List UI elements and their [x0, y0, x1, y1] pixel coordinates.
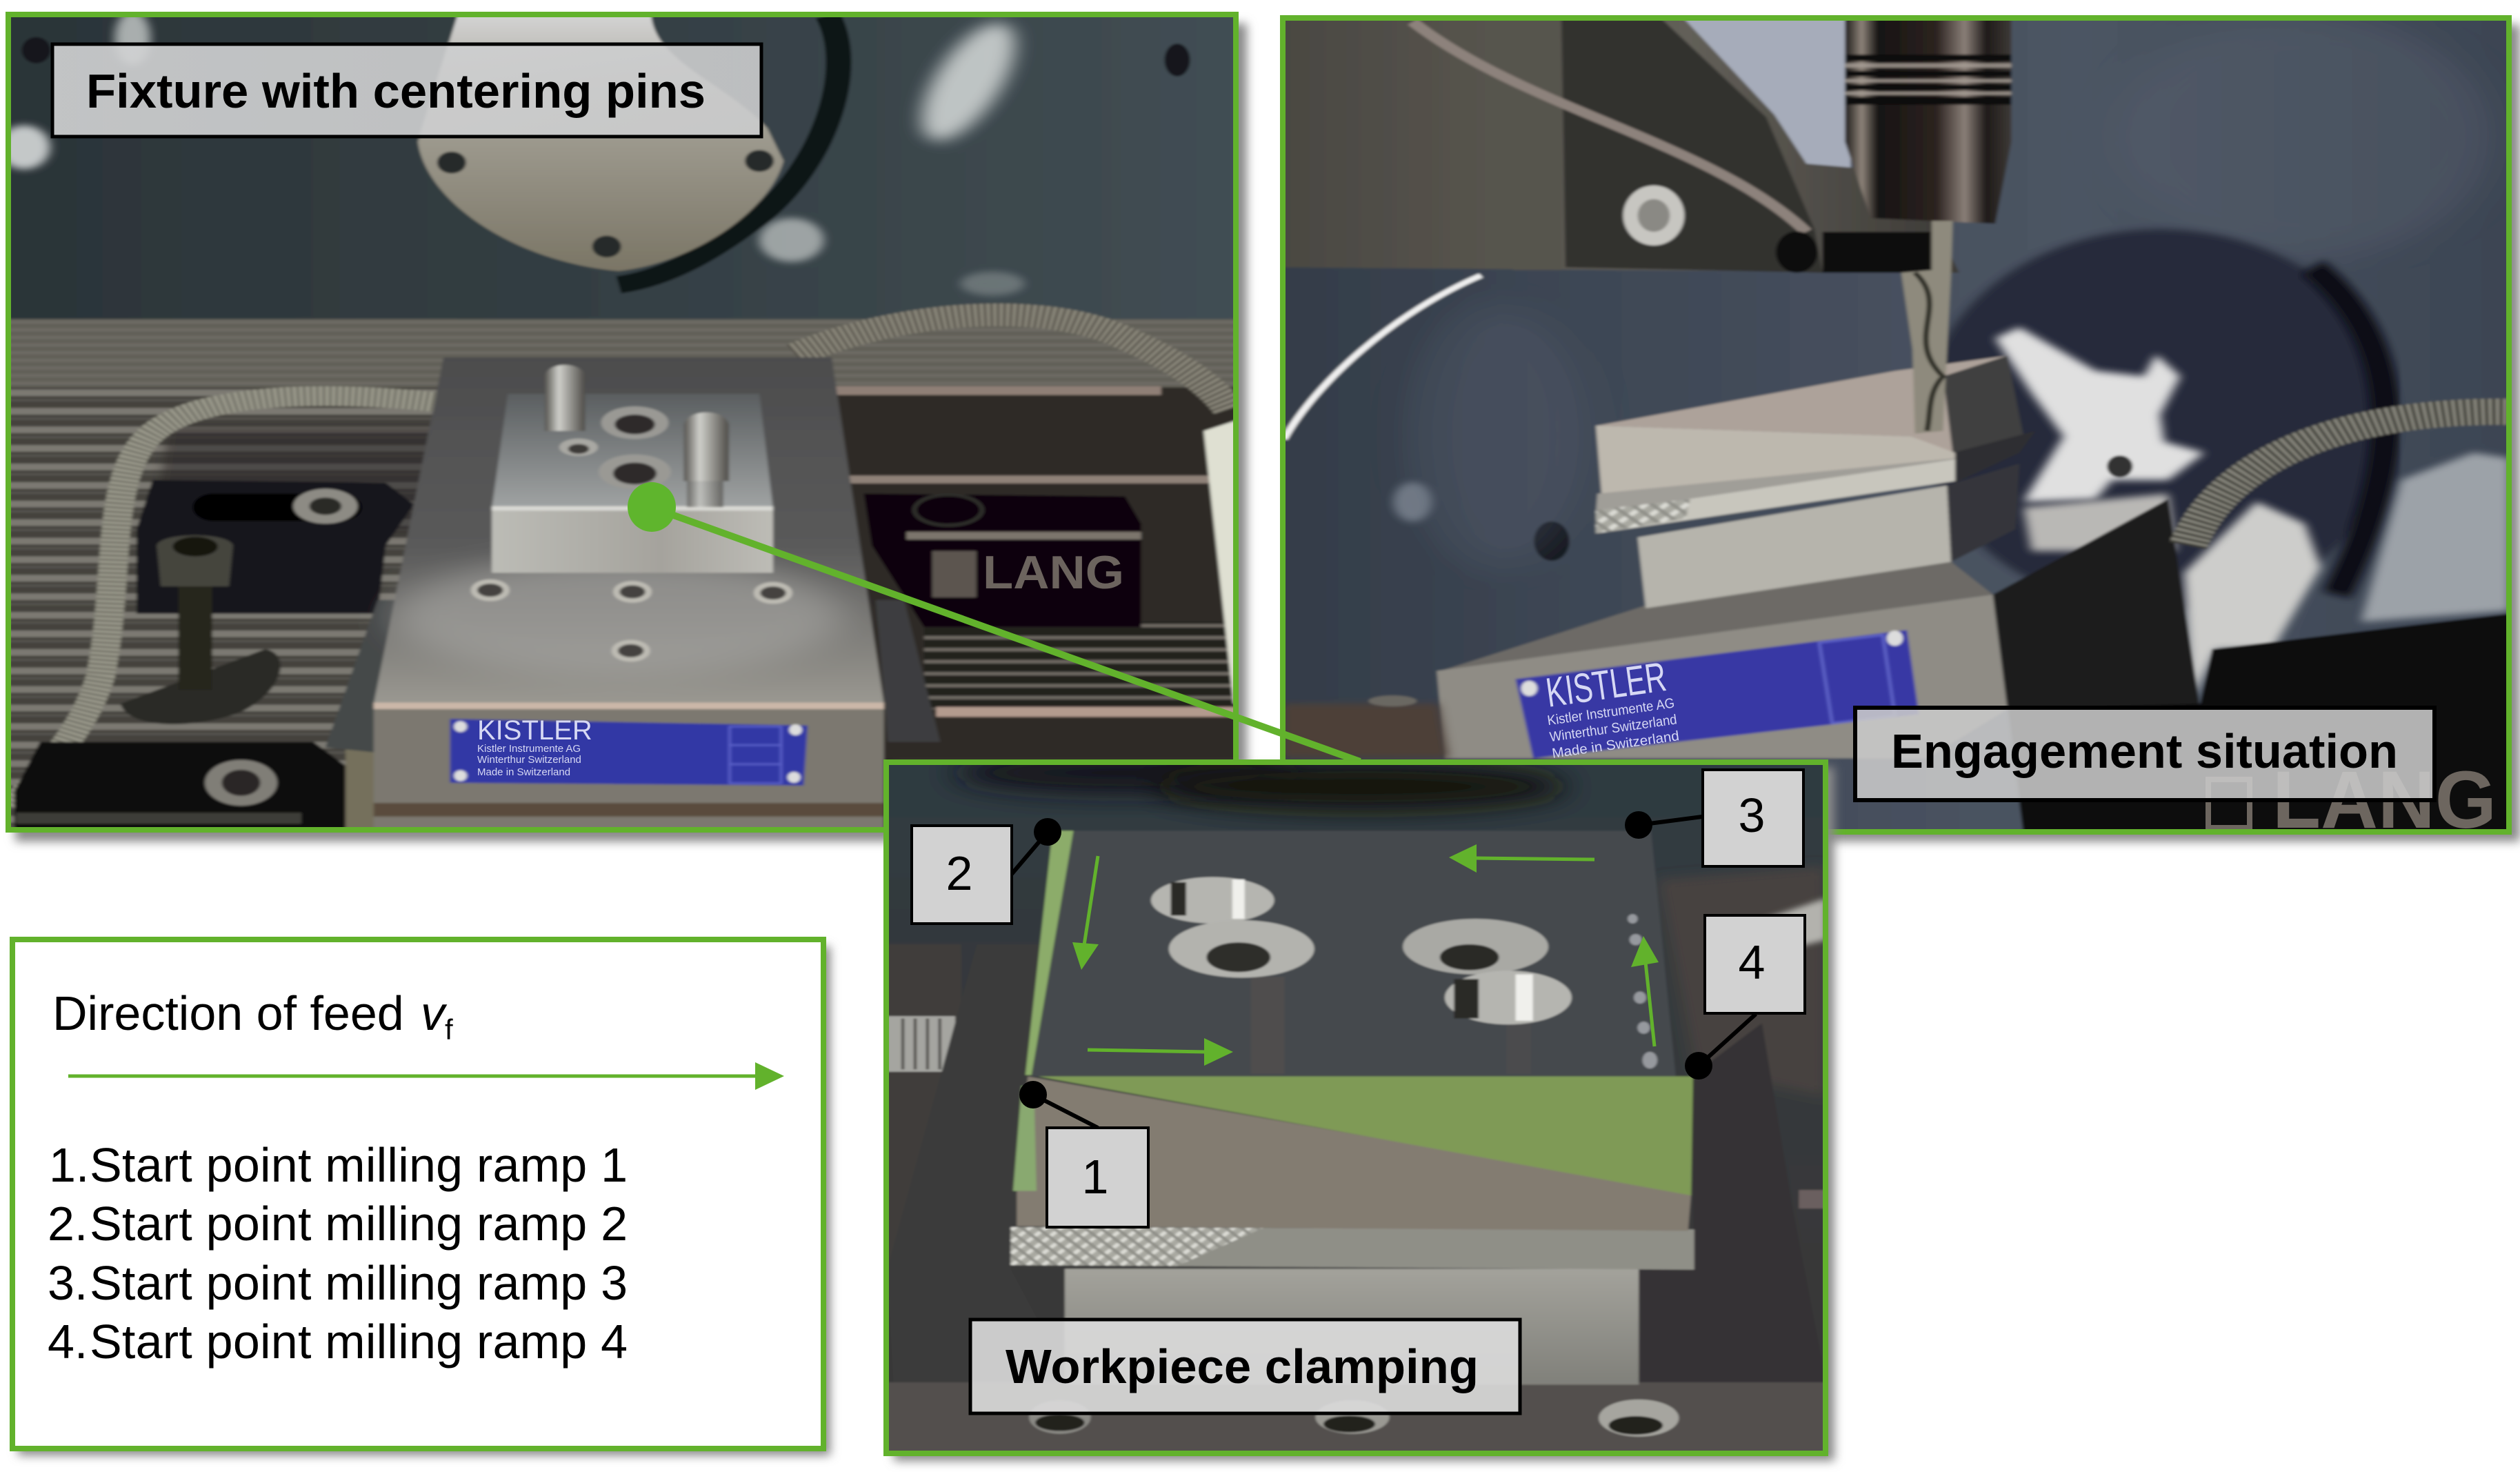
nameplate text: Kistler Instrumente AG	[1546, 696, 1676, 728]
callout 2	[912, 818, 1061, 924]
fixture plate	[888, 944, 1827, 1454]
list of start points: Start point milling ramp 3	[90, 1256, 628, 1310]
green ramp face	[1030, 1075, 1693, 1195]
spring hose right	[796, 315, 1230, 409]
arrow: ramp 1 direction	[1088, 1038, 1233, 1066]
photo: machine table with fixture	[0, 0, 1260, 832]
measuring plate	[326, 357, 940, 829]
panel border	[886, 762, 1826, 1453]
direction of feed label: f	[445, 1013, 453, 1046]
callout 1: 1	[1082, 1150, 1108, 1204]
clamp right with LANG	[864, 494, 1141, 627]
feed arrows on workpiece	[1072, 844, 1659, 1066]
blue sensor nameplate	[450, 719, 808, 786]
machine table ribs right	[832, 386, 1237, 829]
clamp bolt left	[121, 535, 281, 724]
callout 2: 2	[946, 846, 972, 900]
counterbored screws	[559, 406, 671, 489]
panel border	[8, 14, 1236, 830]
label: fixture with centering pins: Fixture with centering pins	[86, 64, 706, 118]
nameplate text	[477, 715, 592, 778]
fixture block	[492, 394, 773, 573]
LANG text: LANG	[2272, 755, 2497, 846]
nameplate text: Winterthur Switzerland	[477, 754, 581, 766]
nameplate text: Made in Switzerland	[1551, 728, 1680, 762]
end mill cutter	[1901, 221, 1952, 434]
arrow: ramp 4 direction	[1631, 936, 1659, 1046]
callout 4: 4	[1739, 935, 1765, 989]
spring hose left	[12, 396, 441, 807]
white tube	[1201, 419, 1233, 705]
milled holes	[1151, 877, 1657, 1068]
fixture disc	[1923, 229, 2510, 698]
machine wall background	[11, 17, 1233, 321]
label: engagement situation	[1855, 708, 2434, 800]
machine wall background	[1260, 0, 2520, 855]
black clamp blocks	[1993, 499, 2510, 835]
nameplate text: Kistler Instrumente AG	[477, 743, 581, 755]
list of start points: 4.	[48, 1315, 88, 1369]
label: fixture with centering pins	[52, 44, 761, 137]
feed direction arrow	[68, 1062, 784, 1090]
callout 1	[1019, 1081, 1148, 1227]
nameplate text: Made in Switzerland	[477, 766, 570, 778]
list of start points: 1.	[49, 1138, 89, 1192]
direction of feed label: v	[421, 986, 448, 1040]
arrow: ramp 2 direction	[1072, 856, 1099, 970]
callout 4	[1685, 915, 1805, 1080]
direction of feed label: Direction of feed	[52, 986, 404, 1040]
list of start points: Start point milling ramp 2	[90, 1197, 628, 1251]
list of start points: Start point milling ramp 1	[90, 1138, 628, 1192]
LANG text: LANG	[983, 546, 1124, 599]
workpiece block	[1638, 464, 2019, 608]
panel: fixture photo	[0, 0, 1260, 842]
panel: engagement situation photo	[1260, 0, 2520, 855]
nameplate text: KISTLER	[477, 715, 592, 746]
panel: workpiece clamping photo	[869, 745, 1834, 1472]
list of start points	[48, 1138, 628, 1369]
list of start points: 3.	[48, 1256, 88, 1310]
label: engagement situation: Engagement situation	[1891, 724, 2398, 778]
blue sensor nameplate	[1516, 630, 1919, 758]
callout 3	[1625, 770, 1803, 866]
label: workpiece clamping	[970, 1320, 1520, 1413]
arrow: ramp 3 direction	[1449, 844, 1594, 873]
machine table ribs left	[8, 319, 1237, 832]
connector line with dot	[628, 482, 1360, 762]
clamp left lower	[14, 742, 378, 829]
white signal cable	[1284, 275, 1481, 439]
callout 3: 3	[1739, 788, 1765, 842]
sensor base plate	[1283, 562, 2008, 758]
ramp front	[1017, 1076, 1691, 1231]
tool holder collet	[1845, 17, 2011, 223]
label: workpiece clamping: Workpiece clamping	[1006, 1340, 1479, 1393]
workpiece base plate	[1010, 1227, 1694, 1270]
dark background	[869, 745, 1834, 1472]
workpiece top surface	[1032, 831, 1676, 1076]
spindle machine housing	[1283, 17, 1959, 272]
panel: legend	[12, 939, 830, 1455]
lower aluminium block	[1065, 1269, 1639, 1384]
nameplate text	[1541, 653, 1680, 762]
nameplate text: Winterthur Switzerland	[1549, 712, 1678, 745]
base screw holes	[1029, 1400, 1679, 1437]
green side face	[1013, 831, 1073, 1191]
plate screw holes	[474, 581, 789, 659]
spring hose	[2188, 412, 2514, 546]
list of start points: 2.	[48, 1197, 88, 1251]
photo: workpiece close-up	[869, 745, 1834, 1472]
photo: cutter in engagement	[1260, 0, 2520, 855]
centering pins	[545, 365, 729, 507]
panel border	[1283, 18, 2509, 832]
list of start points: Start point milling ramp 4	[90, 1315, 628, 1369]
clamp left upper	[137, 480, 414, 614]
nameplate text: KISTLER	[1543, 653, 1669, 716]
workpiece ramps	[1596, 356, 2035, 533]
